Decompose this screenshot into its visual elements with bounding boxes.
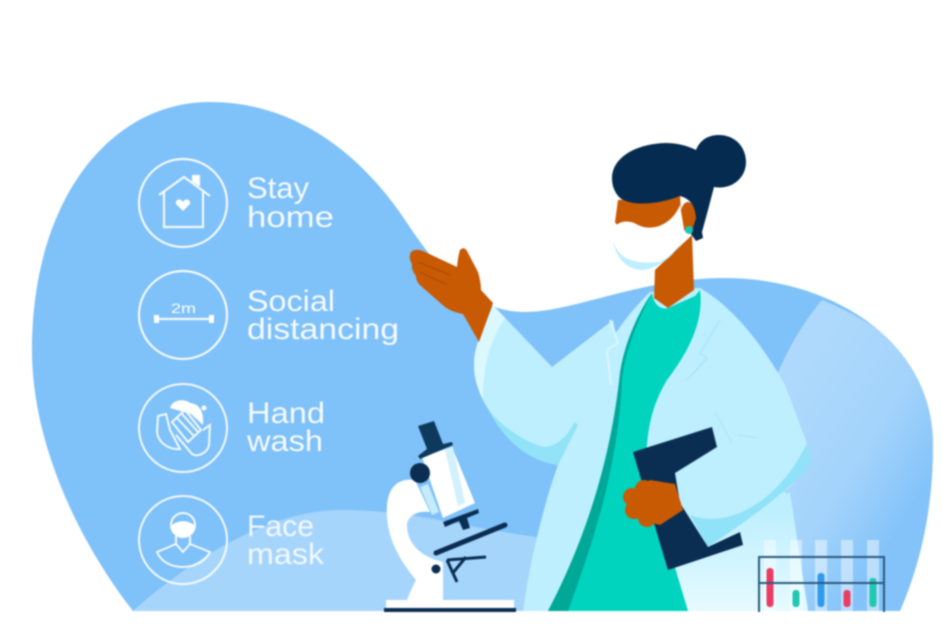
inner top (548, 290, 701, 611)
label: social distancing: distancing (247, 313, 399, 346)
label: social distancing (247, 285, 399, 346)
light hill right (778, 300, 943, 611)
body tube (422, 447, 475, 518)
label: face mask (247, 510, 325, 571)
coat lower panel (640, 420, 808, 611)
icon: face mask (139, 496, 227, 584)
right lapel (687, 320, 720, 380)
label: stay home: Stay (247, 172, 309, 205)
ear (680, 202, 696, 232)
stage support (447, 557, 486, 582)
label: face mask: Face (247, 510, 314, 543)
label: social distancing: Social (247, 285, 335, 318)
cuff highlight (474, 305, 505, 400)
frame (759, 557, 884, 612)
small knob (432, 564, 440, 574)
glass tubes (764, 540, 879, 612)
test tube rack (759, 540, 884, 612)
eyepiece (418, 421, 453, 459)
lapel lines (607, 320, 618, 385)
coat body (523, 288, 811, 611)
gripping hand (623, 480, 683, 527)
label: hand wash (246, 397, 325, 458)
label: stay home (247, 172, 334, 234)
hand (410, 248, 493, 342)
label: stay home: home (247, 201, 334, 234)
face (615, 195, 682, 230)
infographic scene (31, 101, 934, 614)
icon: social distancing (139, 271, 227, 359)
stage (436, 525, 505, 553)
objective (443, 509, 479, 530)
mask shadow (613, 235, 685, 270)
icon: hand wash (139, 384, 227, 472)
sleeve shadow (483, 398, 578, 465)
scientist (410, 135, 811, 611)
clipboard (633, 427, 743, 570)
icon: social distancing: 2m (171, 300, 196, 316)
neck (654, 235, 694, 308)
label: hand wash: wash (246, 425, 323, 458)
lower coat light (665, 492, 808, 611)
label: hand wash: Hand (247, 397, 325, 430)
finger lines (418, 262, 450, 285)
dark teal edge (548, 293, 652, 611)
earring (685, 226, 693, 234)
hair (612, 135, 746, 241)
under-arm shadow (690, 443, 811, 547)
sleeve (474, 305, 625, 447)
icon: stay home (139, 159, 227, 247)
mask (613, 205, 685, 270)
microscope (384, 421, 516, 612)
label: face mask: mask (247, 538, 325, 571)
light hill bottom (133, 510, 560, 611)
focus knob (410, 463, 430, 483)
base (386, 600, 514, 610)
arm (387, 480, 443, 600)
pocket lines (715, 412, 757, 443)
liquids (766, 568, 774, 607)
